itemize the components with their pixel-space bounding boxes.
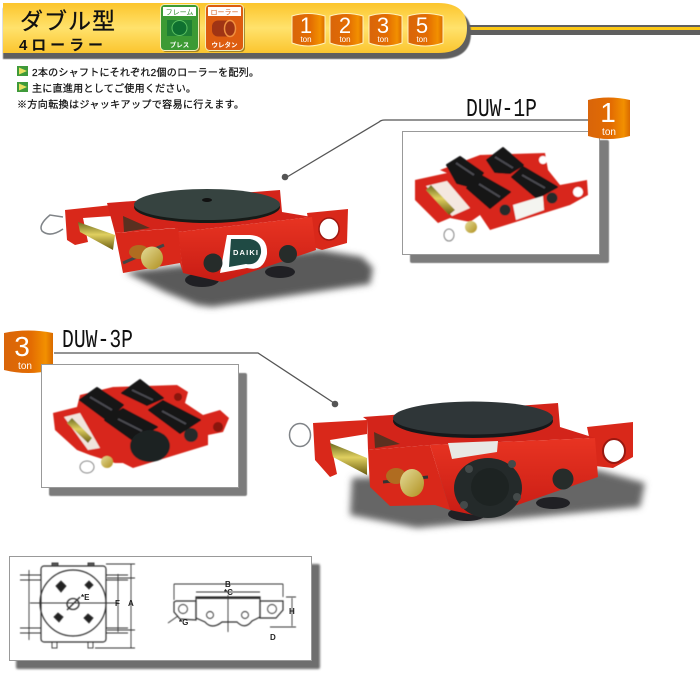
capacity badge: 1 ton: 1 xyxy=(600,97,616,128)
warning label xyxy=(123,216,150,232)
cross pin and gold head xyxy=(383,468,428,497)
capacity badge: 3 ton: ton xyxy=(377,35,389,44)
front left lug xyxy=(368,445,450,510)
front left lug xyxy=(115,228,183,273)
capacity badge: 1 ton xyxy=(588,97,630,139)
top plate xyxy=(107,190,312,233)
capacity badge: 1 ton: ton xyxy=(300,35,312,44)
capacity badge: 3 ton xyxy=(369,13,402,46)
ring pin xyxy=(41,215,63,234)
section: DUW-3P xyxy=(4,325,645,528)
drawing letters: side view: *C xyxy=(224,588,233,597)
subtitle: 4ローラー xyxy=(19,37,103,54)
feature notes xyxy=(17,66,259,111)
floor shadow xyxy=(350,470,645,528)
capacity badge: 3 ton: 3 xyxy=(377,13,389,38)
capacity badge: 1 ton: ton xyxy=(602,127,616,138)
black cylinder cover xyxy=(454,458,522,518)
pin shaft xyxy=(330,443,367,475)
product photo: DUW-1P roller xyxy=(41,189,373,307)
small roller photo xyxy=(53,380,229,473)
title: ダブル型 xyxy=(20,8,115,34)
icon: frame press xyxy=(160,4,200,52)
wheels xyxy=(185,266,295,287)
warning label xyxy=(374,432,400,448)
floor shadow xyxy=(125,250,373,307)
icon: bullet 1 xyxy=(17,66,28,76)
note line 1: 2本のシャフトにそれぞれ2個のローラーを配列。 xyxy=(32,66,259,79)
icon: roller urethane: ローラー xyxy=(210,8,238,16)
silver label strip xyxy=(448,441,498,459)
icon: bullet 2 xyxy=(17,82,28,92)
leader line to product photo xyxy=(282,120,590,180)
drawing letters: side view: B xyxy=(225,580,231,589)
turntable disc xyxy=(134,189,280,223)
capacity badge: 3 ton: 3 xyxy=(14,331,30,362)
small roller photo xyxy=(415,148,588,241)
model name: DUW-1P xyxy=(466,94,537,124)
turntable disc xyxy=(393,402,553,438)
DAIKI logo: DAIKI xyxy=(233,248,258,257)
drawing letters: top view: *E xyxy=(81,593,90,602)
top view drawing xyxy=(20,563,135,648)
capacity badge: 2 ton xyxy=(330,13,363,46)
icon: frame press: フレーム xyxy=(166,8,193,16)
yellow header bar xyxy=(3,3,471,59)
right lifting lug xyxy=(587,422,633,468)
capacity badge: 3 ton xyxy=(4,330,53,373)
back flange xyxy=(313,420,367,477)
product photo: DUW-3P roller xyxy=(290,402,645,528)
photo panel xyxy=(402,132,609,263)
icon: roller urethane xyxy=(206,4,245,52)
bolts xyxy=(204,245,297,272)
drawing letters: side view xyxy=(179,580,295,642)
header rail extending to the right edge xyxy=(460,25,700,35)
drawing letters: side view: H xyxy=(289,607,295,616)
icon: frame press: プレス xyxy=(170,41,189,49)
note line 3: ※方向転換はジャッキアップで容易に行えます。 xyxy=(17,98,244,111)
dimension diagram panel xyxy=(10,556,320,669)
front plate xyxy=(430,438,598,517)
wheels xyxy=(448,497,570,521)
right lifting lug xyxy=(307,209,348,250)
drawing letters: top view: F xyxy=(115,599,120,608)
header banner xyxy=(3,3,700,59)
bolt xyxy=(552,468,574,490)
pin shaft xyxy=(78,222,115,250)
side view drawing xyxy=(168,584,296,632)
leader line to product photo xyxy=(54,353,338,407)
note line 2: 主に直進用としてご使用ください。 xyxy=(32,82,196,95)
capacity badge: 2 ton: ton xyxy=(339,35,351,44)
back flange xyxy=(65,205,112,245)
model name: DUW-3P xyxy=(62,325,133,355)
capacity badge: 1 ton xyxy=(292,13,325,46)
drawing letters: top view: A xyxy=(128,599,134,608)
drawing letters: top view xyxy=(81,593,134,608)
DAIKI logo xyxy=(220,235,267,273)
capacity badge: 5 ton: 5 xyxy=(416,13,428,38)
cross pin and gold head xyxy=(123,245,164,270)
section: DUW-1P xyxy=(41,94,630,307)
drawing letters: side view: D xyxy=(270,633,276,642)
top plate xyxy=(363,403,595,450)
capacity badge: 2 ton: 2 xyxy=(339,13,351,38)
capacity badge: 1 ton: 1 xyxy=(300,13,312,38)
front plate xyxy=(178,217,316,282)
capacity badge: 5 ton xyxy=(408,13,443,46)
capacity badge: 5 ton: ton xyxy=(416,35,428,44)
icon: roller urethane: ウレタン xyxy=(212,40,238,49)
ring pin xyxy=(290,424,310,446)
drawing letters: side view: *G xyxy=(179,618,188,627)
capacity badge: 3 ton: ton xyxy=(18,361,32,372)
photo panel xyxy=(42,364,247,496)
